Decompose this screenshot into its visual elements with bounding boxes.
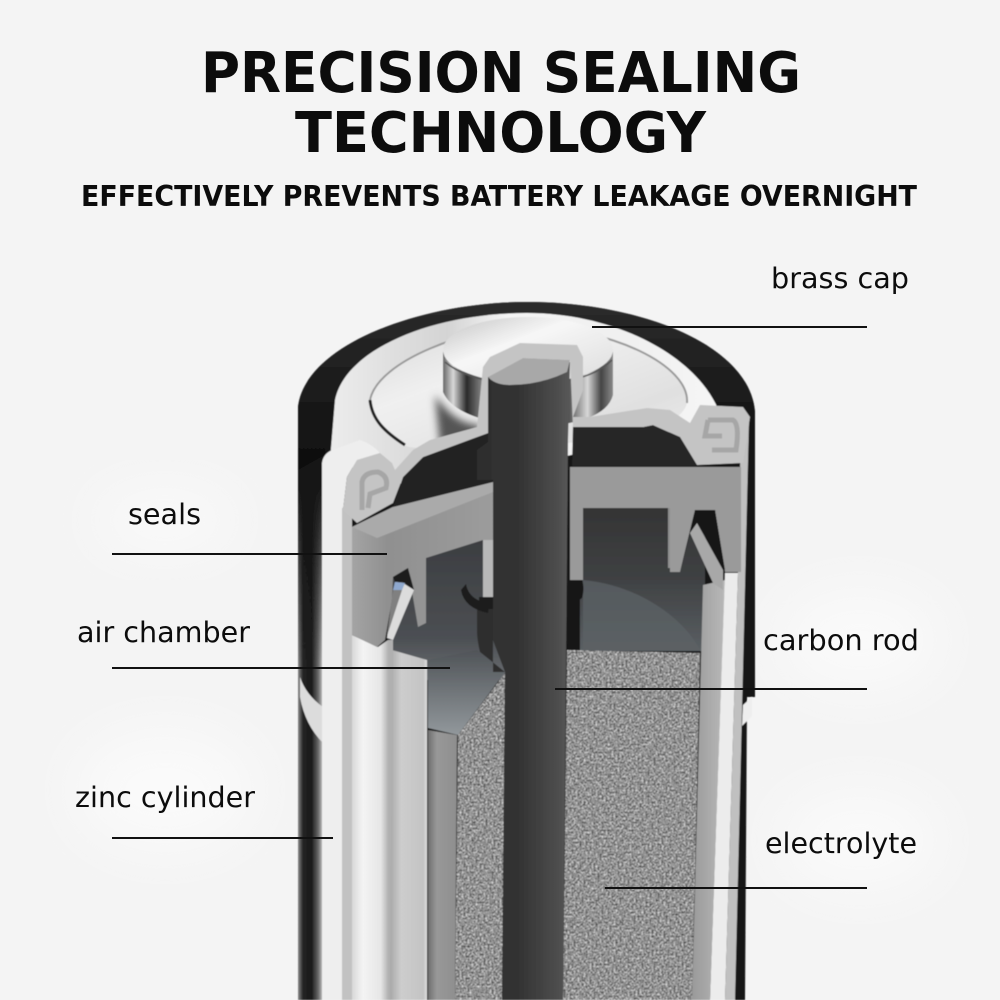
callout: air chamber: air chamber xyxy=(77,616,250,649)
seals xyxy=(352,467,741,647)
callout: carbon rod: carbon rod xyxy=(763,624,919,657)
title xyxy=(201,41,801,166)
carbon rod xyxy=(461,358,584,1000)
outer black shell xyxy=(298,302,755,1000)
battery cutaway illustration xyxy=(298,302,756,1000)
callout: seals: seals xyxy=(128,498,201,531)
subtitle: EFFECTIVELY PREVENTS BATTERY LEAKAGE OVERNIGHT xyxy=(81,180,918,213)
top metal crimp xyxy=(343,343,750,523)
callout: brass cap: brass cap xyxy=(771,262,909,295)
right chamber xyxy=(580,505,705,651)
callout: zinc cylinder: zinc cylinder xyxy=(75,781,255,814)
title: TECHNOLOGY xyxy=(295,101,707,166)
callout: electrolyte: electrolyte xyxy=(765,827,917,860)
sloped electrolyte top xyxy=(428,650,505,735)
left chamber xyxy=(390,540,505,680)
electrolyte granules xyxy=(455,650,700,1000)
title: PRECISION SEALING xyxy=(201,41,801,106)
silver rim and cap xyxy=(330,313,722,490)
zinc cylinder and inner walls xyxy=(322,420,756,1000)
